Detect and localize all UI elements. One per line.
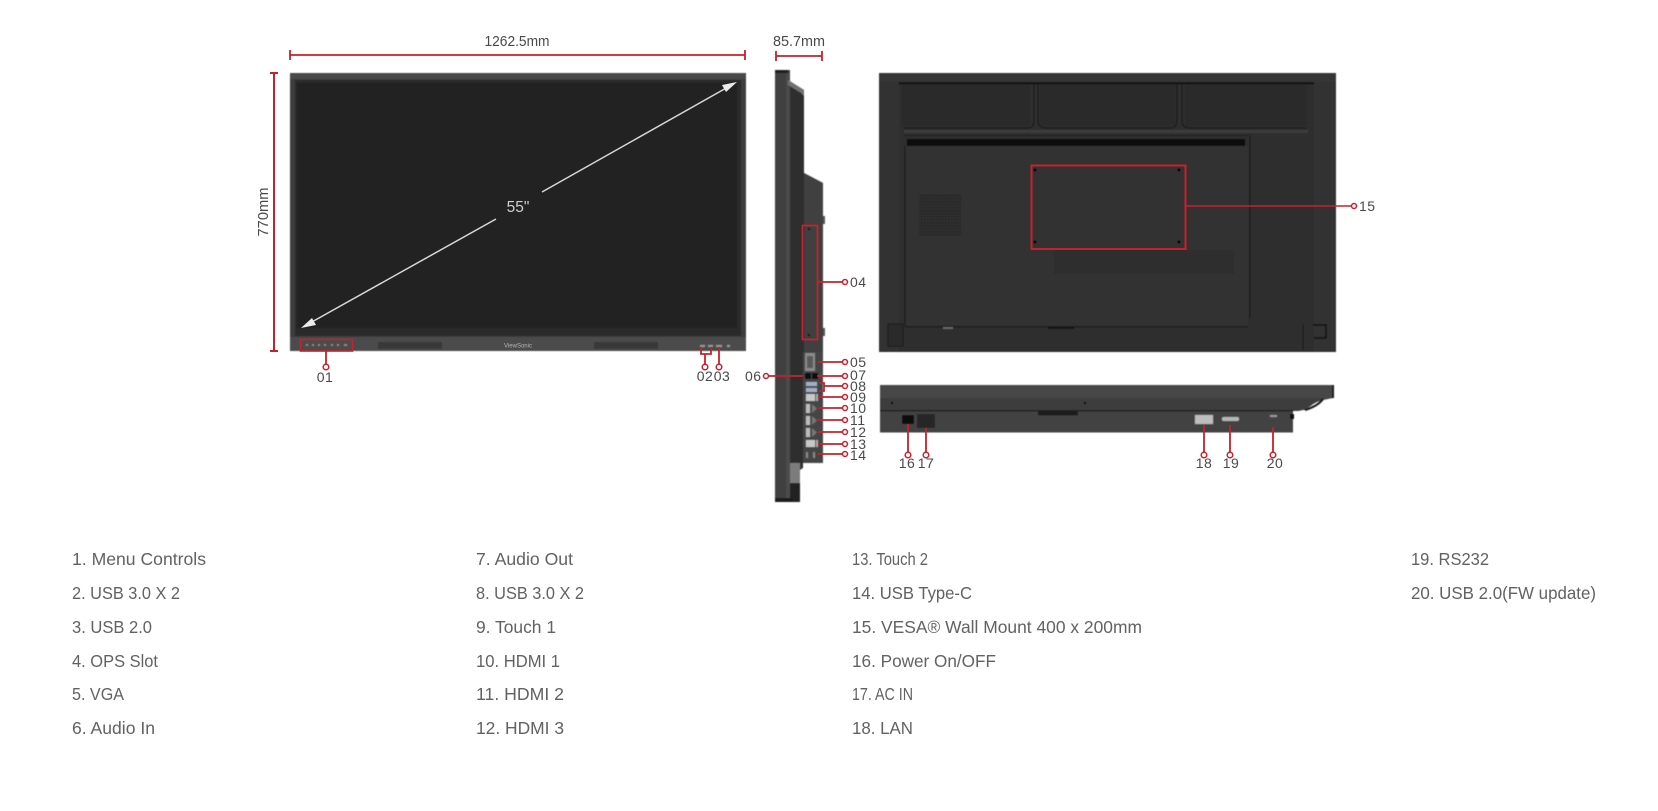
- legend column 3: 17. AC IN: [852, 684, 913, 704]
- callouts 04 to 14 on side view: 12: [850, 424, 867, 440]
- callouts 04 to 14 on side view: 06: [745, 368, 762, 384]
- callouts 04 to 14 on side view: 10: [850, 400, 867, 416]
- VESA mount callout 15: 15: [1359, 198, 1376, 214]
- callouts 01 to 03 on front view: 02: [697, 368, 713, 384]
- legend column 1: 2. USB 3.0 X 2: [72, 583, 180, 603]
- callouts 01 to 03 on front view: [300, 340, 730, 385]
- bottom view of display: [880, 385, 1334, 432]
- callouts 01 to 03 on front view: 01: [317, 369, 333, 385]
- callouts 01 to 03 on front view: 03: [714, 368, 730, 384]
- legend column 2: 9. Touch 1: [476, 617, 556, 637]
- side view of display: [775, 70, 825, 502]
- legend column 1: 4. OPS Slot: [72, 651, 158, 671]
- callouts 16 to 20 on bottom view: 20: [1267, 455, 1283, 471]
- callouts 04 to 14 on side view: 04: [850, 274, 867, 290]
- legend column 2: 12. HDMI 3: [476, 718, 564, 738]
- legend column 1: 3. USB 2.0: [72, 617, 152, 637]
- callouts 16 to 20 on bottom view: 17: [918, 455, 934, 471]
- legend column 1: 1. Menu Controls: [72, 549, 206, 569]
- callouts 16 to 20 on bottom view: 16: [899, 455, 915, 471]
- callouts 04 to 14 on side view: 08: [850, 378, 867, 394]
- legend column 3: 15. VESA® Wall Mount 400 x 200mm: [852, 617, 1142, 637]
- I/O port panel: [803, 352, 823, 463]
- legend column 3: 13. Touch 2: [852, 549, 928, 569]
- legend column 1: 5. VGA: [72, 684, 124, 704]
- legend column 3: [852, 549, 1142, 738]
- legend column 1: [72, 549, 206, 738]
- screen diagonal arrow: 55 inch: [301, 82, 737, 328]
- callouts 04 to 14 on side view: 14: [850, 447, 867, 463]
- callouts 04 to 14 on side view: 11: [850, 412, 866, 428]
- legend column 2: 8. USB 3.0 X 2: [476, 583, 584, 603]
- legend column 3: 18. LAN: [852, 718, 913, 738]
- depth dimension: 85.7mm: 85.7mm: [773, 33, 825, 50]
- callouts 16 to 20 on bottom view: 19: [1223, 455, 1239, 471]
- width dimension: 1262.5mm: [290, 33, 745, 60]
- callouts 04 to 14 on side view: 09: [850, 389, 867, 405]
- legend column 4: 19. RS232: [1411, 549, 1489, 569]
- callouts 16 to 20 on bottom view: 18: [1196, 455, 1212, 471]
- legend column 2: 7. Audio Out: [476, 549, 573, 569]
- callouts 04 to 14 on side view: 13: [850, 436, 867, 452]
- width dimension: 1262.5mm: 1262.5mm: [484, 33, 550, 50]
- depth dimension: 85.7mm: [773, 33, 825, 61]
- callouts 04 to 14 on side view: 05: [850, 354, 867, 370]
- legend column 3: 16. Power On/OFF: [852, 651, 996, 671]
- height dimension: 770mm: 770mm: [255, 188, 272, 236]
- callouts 16 to 20 on bottom view: [899, 424, 1283, 471]
- VESA mount callout 15: [1032, 166, 1376, 249]
- legend column 4: [1411, 549, 1596, 603]
- callouts 04 to 14 on side view: [745, 226, 867, 463]
- legend column 2: [476, 549, 584, 738]
- rear view of display: [879, 73, 1336, 352]
- legend column 2: 11. HDMI 2: [476, 684, 564, 704]
- legend column 2: 10. HDMI 1: [476, 651, 560, 671]
- legend column 3: 14. USB Type-C: [852, 583, 972, 603]
- brand logo: ViewSonic: [504, 344, 532, 350]
- front view of display: [290, 73, 746, 351]
- callouts 04 to 14 on side view: 07: [850, 367, 867, 383]
- legend column 1: 6. Audio In: [72, 718, 155, 738]
- legend column 4: 20. USB 2.0(FW update): [1411, 583, 1596, 603]
- screen diagonal arrow: 55 inch: 55": [507, 199, 529, 216]
- height dimension: 770mm: [255, 73, 278, 351]
